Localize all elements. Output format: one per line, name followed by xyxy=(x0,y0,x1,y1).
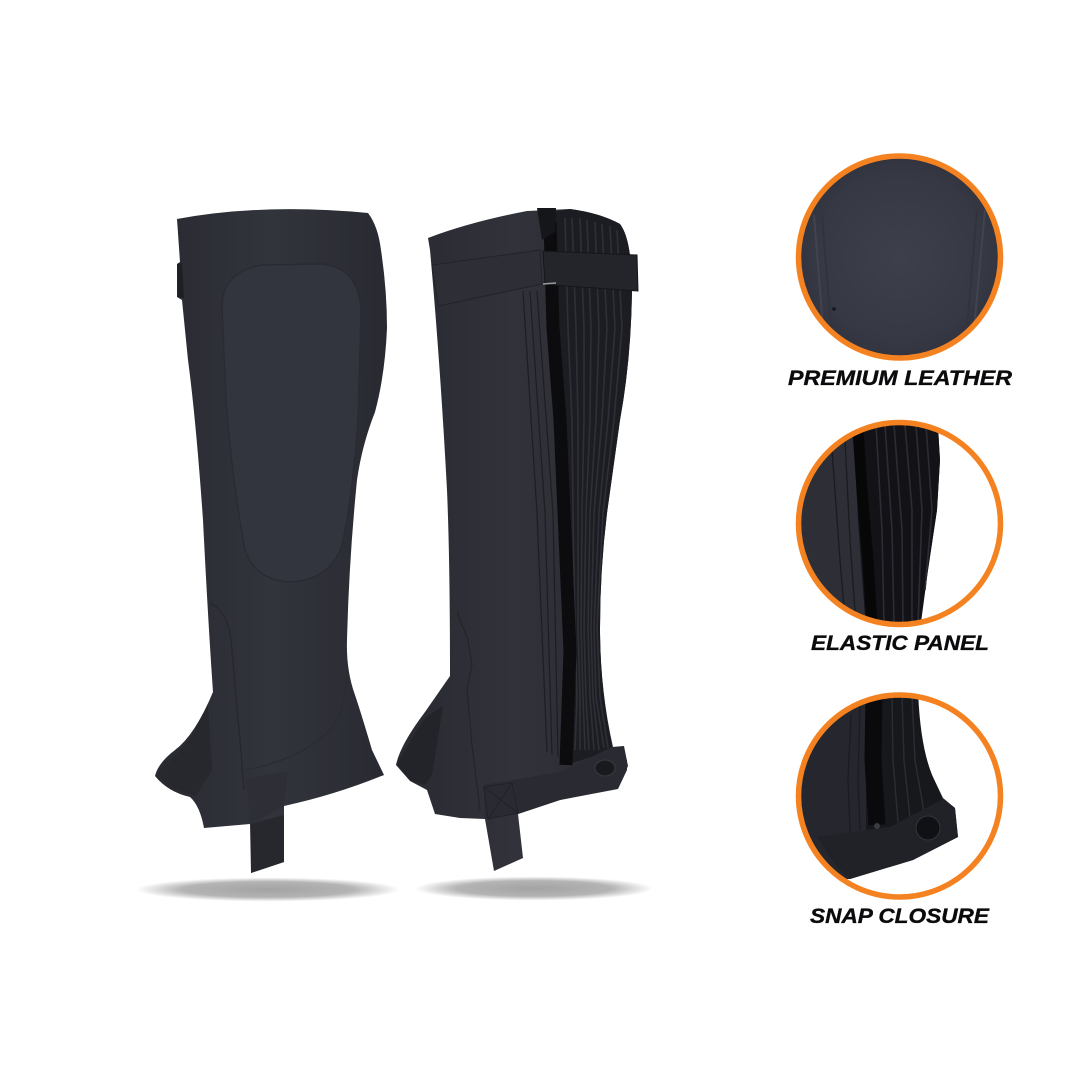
right half chap (zip view) xyxy=(396,208,638,871)
floor shadow left xyxy=(136,878,400,902)
callout: snap closure xyxy=(790,690,1010,928)
left chap strap patch xyxy=(246,771,288,824)
right chap zipper xyxy=(550,222,570,765)
right chap heel seam xyxy=(457,612,480,810)
right chap top zipper pull xyxy=(537,208,556,240)
right chap strap patch xyxy=(484,783,518,819)
right chap top band xyxy=(432,250,542,306)
left chap foot strap xyxy=(251,815,284,873)
closeup fabric texture xyxy=(801,158,998,356)
right chap heel elastic xyxy=(397,706,443,785)
left half chap (outer view) xyxy=(155,209,387,873)
orange ring xyxy=(798,695,1000,897)
left chap front seam xyxy=(245,665,347,770)
label: ELASTIC PANEL xyxy=(811,632,989,655)
callout: elastic panel xyxy=(790,415,1010,655)
closeup elastic panel photo xyxy=(801,425,940,622)
right chap ribs xyxy=(565,218,622,750)
right chap top buckle strap xyxy=(543,251,638,291)
left chap heel elastic xyxy=(158,705,212,796)
label: PREMIUM LEATHER xyxy=(788,367,1013,390)
left chap shin padding stitching xyxy=(222,264,361,582)
right chap snap button xyxy=(595,760,615,776)
right chap elastic rib panel xyxy=(553,209,632,765)
floor shadow right xyxy=(415,876,653,900)
orange ring xyxy=(798,422,1000,624)
snap button xyxy=(916,816,940,840)
left chap velcro tab xyxy=(177,263,184,298)
orange ring xyxy=(798,156,1000,358)
right chap buckle xyxy=(543,283,556,284)
left chap heel seam xyxy=(210,603,244,790)
closeup snap closure photo xyxy=(801,698,958,880)
right chap stitched seams xyxy=(523,291,558,757)
label: SNAP CLOSURE xyxy=(810,905,990,928)
right chap ankle snap strap xyxy=(484,746,628,819)
right chap body xyxy=(396,209,632,871)
product infographic canvas xyxy=(141,153,1012,924)
left chap body xyxy=(155,209,387,873)
callout: premium leather xyxy=(788,150,1013,390)
